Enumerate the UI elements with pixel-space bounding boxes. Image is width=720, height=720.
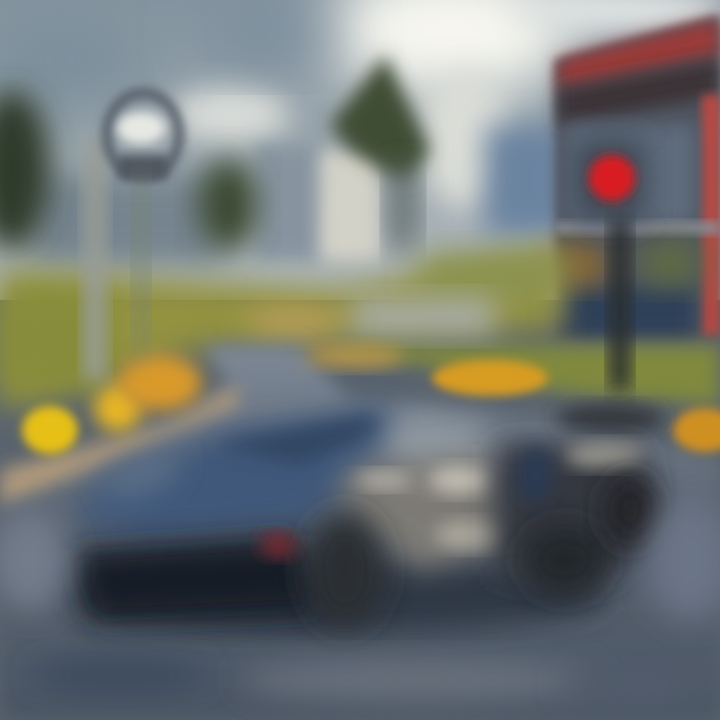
red building <box>550 15 720 340</box>
yellow flower beds <box>22 344 720 454</box>
trees <box>0 55 430 251</box>
background buildings <box>30 125 570 265</box>
wet road reflections <box>0 500 720 707</box>
road <box>0 345 720 720</box>
street lamp <box>84 93 179 380</box>
sky with clouds <box>0 0 720 300</box>
traffic light <box>575 140 645 390</box>
grass <box>0 250 720 410</box>
left curb <box>0 385 240 505</box>
car <box>68 408 660 633</box>
